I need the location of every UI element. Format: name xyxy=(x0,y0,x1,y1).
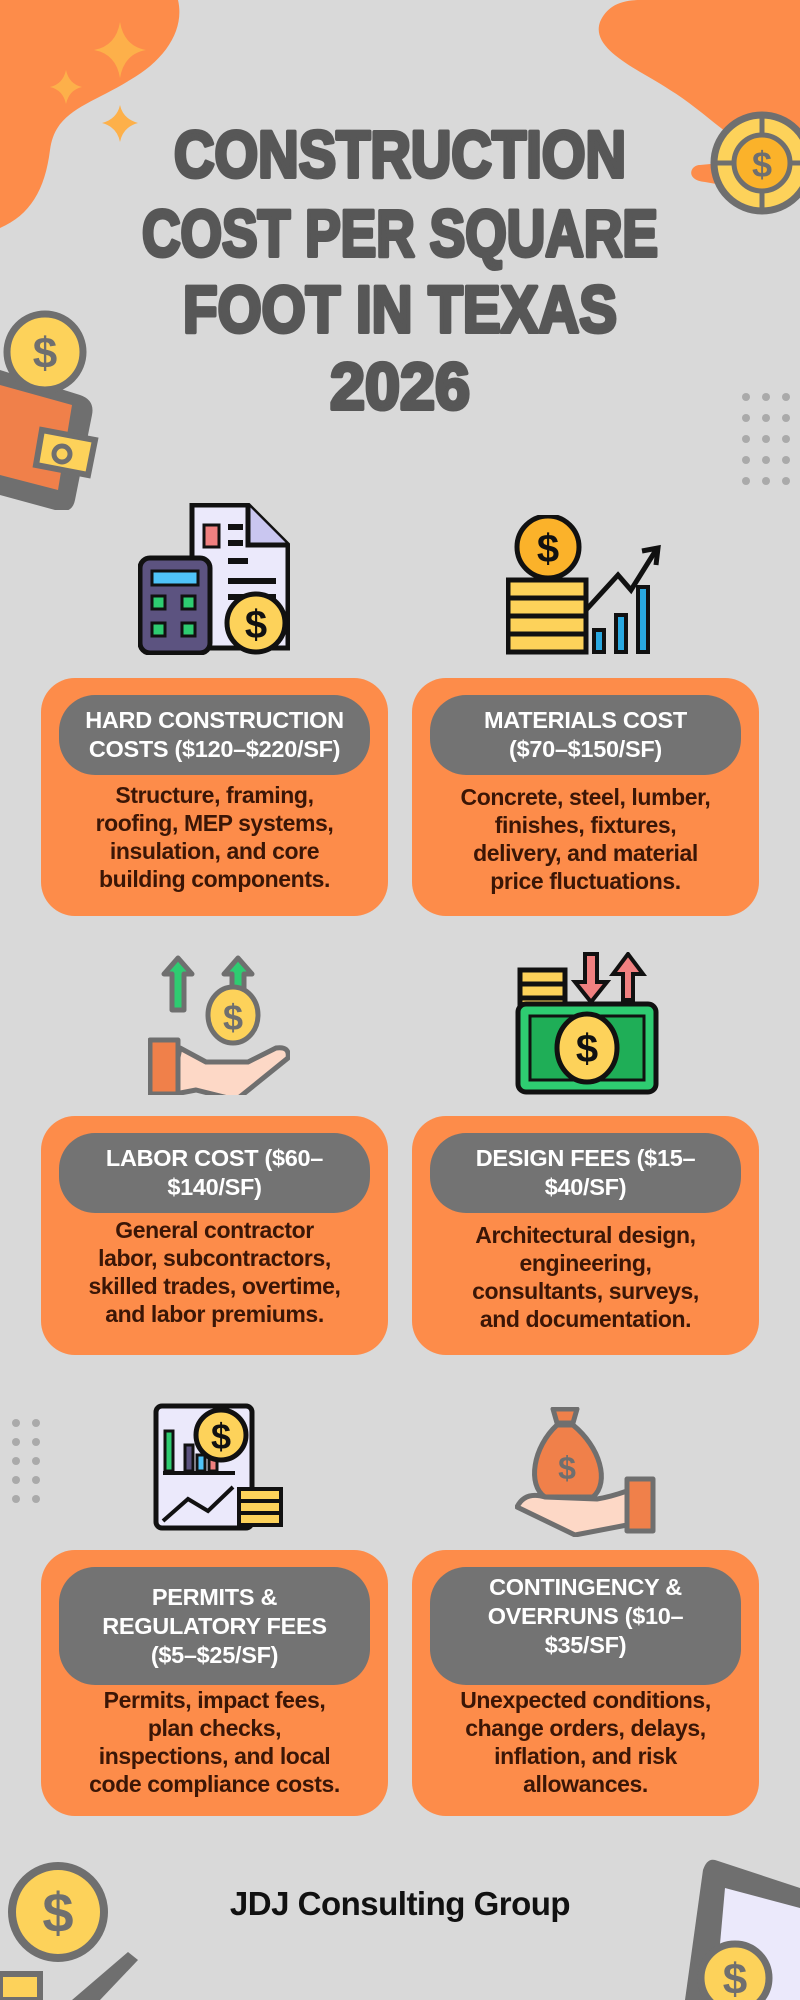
text: materials description xyxy=(461,784,710,894)
text: permits description: code compliance costs. xyxy=(89,1771,340,1797)
text: hard construction description: Structure, framing, xyxy=(115,782,314,808)
card: design fees xyxy=(412,1116,759,1355)
card: permits and regulatory fees xyxy=(41,1550,388,1816)
heading: contingency: $35/SF) xyxy=(545,1632,626,1658)
text: hard construction description xyxy=(96,782,333,892)
heading: design fees: $40/SF) xyxy=(545,1174,626,1200)
text: materials description: finishes, fixtures, xyxy=(495,812,676,838)
icon: cash bill with arrows xyxy=(516,952,658,1094)
card: contingency and overruns xyxy=(412,1550,759,1816)
heading: design fees: DESIGN FEES ($15– xyxy=(476,1145,695,1171)
heading: permits: ($5–$25/SF) xyxy=(151,1642,278,1668)
heading: labor xyxy=(59,1133,370,1213)
card: materials cost xyxy=(412,678,759,916)
text: design description: consultants, surveys, xyxy=(472,1278,699,1304)
text: permits description xyxy=(89,1687,340,1797)
text: labor description: skilled trades, overtime, xyxy=(88,1273,341,1299)
text: contingency description xyxy=(460,1687,711,1797)
text: contingency description: allowances. xyxy=(523,1771,648,1797)
icon: hand with coin and up arrows xyxy=(148,956,290,1095)
heading: contingency: CONTINGENCY & xyxy=(489,1574,682,1600)
text: design description xyxy=(472,1222,699,1332)
text: labor description xyxy=(88,1217,341,1327)
text: design description: and documentation. xyxy=(480,1306,691,1332)
text: contingency description: Unexpected conditions, xyxy=(460,1687,711,1713)
icon: coins stack and growth chart: $ xyxy=(537,527,559,571)
title: 2026 xyxy=(330,349,470,423)
decoration: bottom-left coin with arrow: $ xyxy=(42,1881,74,1944)
heading: permits: PERMITS & xyxy=(152,1584,277,1610)
title: COST PER SQUARE xyxy=(142,196,658,270)
heading: materials xyxy=(430,695,741,775)
text: labor description: labor, subcontractors, xyxy=(98,1245,331,1271)
icon: hand with money bag xyxy=(515,1407,656,1537)
title: CONSTRUCTION xyxy=(174,117,626,191)
heading: hard construction xyxy=(59,695,370,775)
text: labor description: and labor premiums. xyxy=(105,1301,324,1327)
text: contingency description: inflation, and risk xyxy=(494,1743,677,1769)
heading: labor: $140/SF) xyxy=(167,1174,262,1200)
icon: hand with coin and up arrows: $ xyxy=(223,997,243,1038)
text: design description: engineering, xyxy=(520,1250,651,1276)
text: design description: Architectural design, xyxy=(475,1222,696,1248)
decoration: top-left orange blob with sparkles xyxy=(0,0,180,228)
decoration: left wallet with coin: $ xyxy=(33,329,57,378)
text: materials description: price fluctuations. xyxy=(490,868,681,894)
icon: coins stack and growth chart xyxy=(506,515,661,654)
heading: permits: REGULATORY FEES xyxy=(102,1612,327,1638)
heading: labor: LABOR COST ($60– xyxy=(106,1145,323,1171)
text: permits description: inspections, and local xyxy=(99,1743,330,1769)
decoration: dots left xyxy=(12,1419,40,1503)
card: hard construction costs xyxy=(41,678,388,916)
decoration: bottom-left coin with arrow xyxy=(0,1862,138,2000)
heading: materials: MATERIALS COST xyxy=(484,707,687,733)
decoration: left wallet with coin xyxy=(0,310,98,510)
card: labor cost xyxy=(41,1116,388,1355)
text: permits description: plan checks, xyxy=(148,1715,281,1741)
text: hard construction description: building components. xyxy=(99,866,330,892)
icon: calculator and invoice xyxy=(138,503,290,655)
text: materials description: Concrete, steel, lumber, xyxy=(461,784,710,810)
icon: financial report xyxy=(154,1404,283,1530)
decoration: dots right xyxy=(742,393,790,485)
text: labor description: General contractor xyxy=(115,1217,314,1243)
text: contingency description: change orders, delays, xyxy=(465,1715,706,1741)
decoration: top-right orange hand with coin: $ xyxy=(752,144,772,185)
icon: hand with money bag: $ xyxy=(558,1450,576,1486)
heading: contingency: OVERRUNS ($10– xyxy=(488,1602,683,1628)
icon: financial report: $ xyxy=(211,1416,231,1457)
icon: cash bill with arrows: $ xyxy=(576,1027,598,1071)
icon: calculator and invoice: $ xyxy=(245,603,267,647)
text: materials description: delivery, and material xyxy=(473,840,698,866)
heading: design fees xyxy=(430,1133,741,1213)
text: hard construction description: insulation, and core xyxy=(110,838,319,864)
text: hard construction description: roofing, MEP systems, xyxy=(96,810,333,836)
title xyxy=(142,117,658,423)
text: permits description: Permits, impact fees, xyxy=(104,1687,325,1713)
title: FOOT IN TEXAS xyxy=(183,272,617,346)
heading: hard construction: HARD CONSTRUCTION xyxy=(85,707,344,733)
heading: permits xyxy=(59,1567,370,1685)
decoration: bottom-right tablet with coin xyxy=(685,1860,800,2000)
decoration: top-right orange hand with coin xyxy=(598,0,800,214)
footer: company name: JDJ Consulting Group xyxy=(230,1885,570,1922)
heading: contingency xyxy=(430,1567,741,1685)
heading: materials: ($70–$150/SF) xyxy=(509,736,662,762)
heading: hard construction: COSTS ($120–$220/SF) xyxy=(89,736,340,762)
